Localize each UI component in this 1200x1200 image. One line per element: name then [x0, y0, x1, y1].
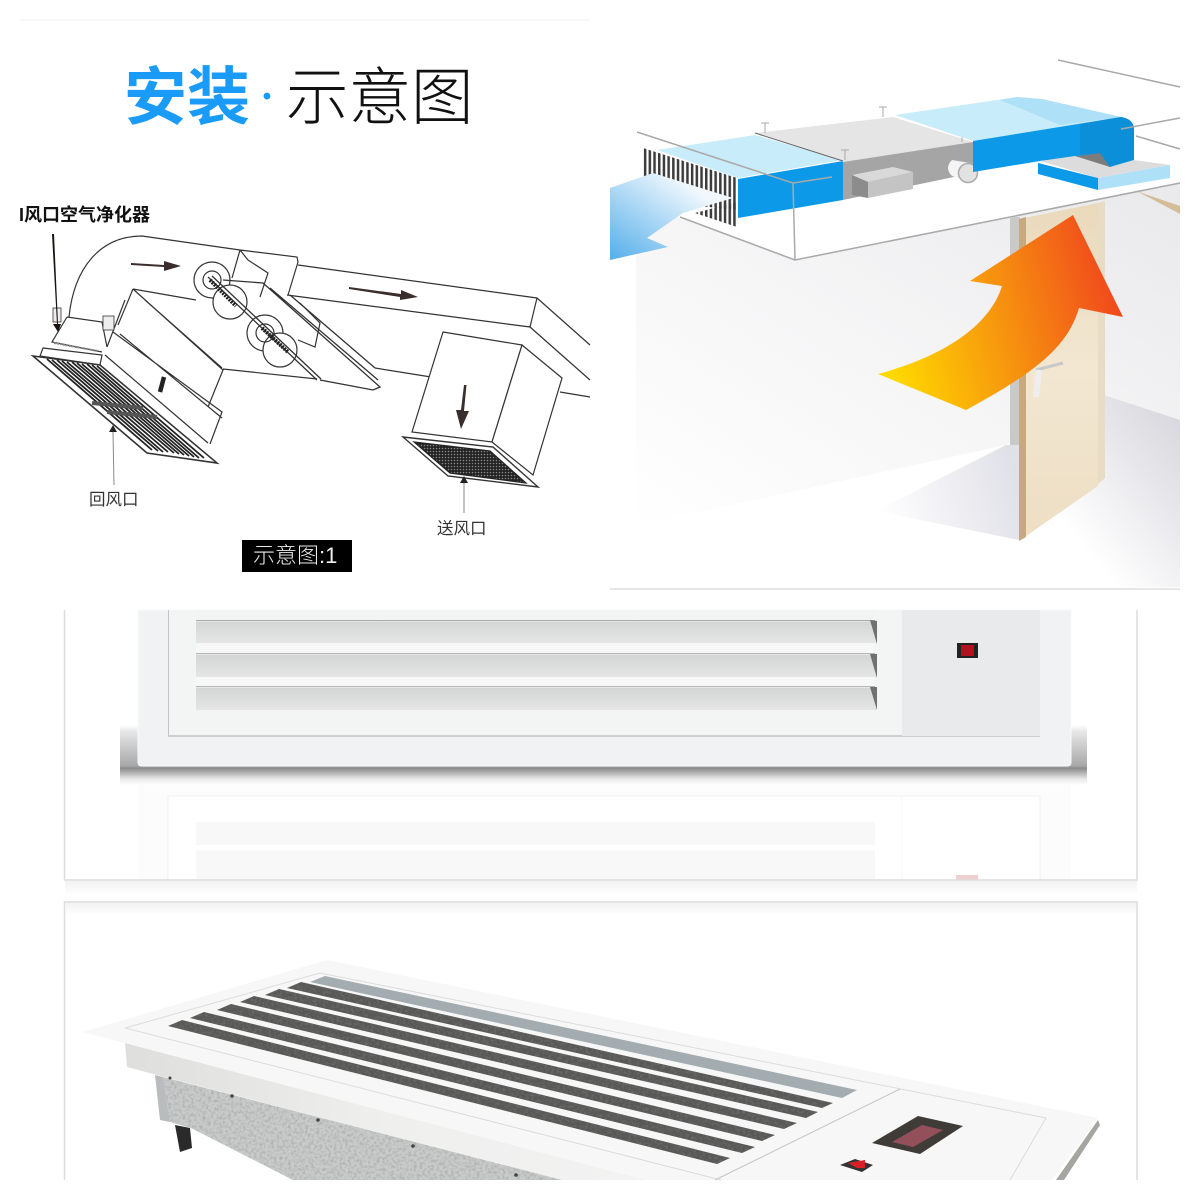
- ceiling lines: [637, 60, 1180, 260]
- return air box: [52, 300, 222, 444]
- supply diffuser: [1038, 156, 1170, 190]
- panel: grille photo: [64, 902, 1137, 1180]
- flow arrows: [131, 261, 469, 429]
- top rule: [20, 19, 590, 21]
- label: supply air: [437, 476, 486, 538]
- label: return air: [89, 425, 138, 509]
- label: return air: 回风口: [89, 491, 138, 509]
- fan unit: [194, 250, 380, 390]
- label: purifier: I风口空气净化器: [19, 204, 150, 225]
- title: •: [263, 83, 271, 110]
- hot air arrow: [878, 215, 1123, 410]
- reflection: [138, 785, 1071, 880]
- unit frame: [138, 610, 1071, 766]
- unit shadow: [120, 725, 1087, 785]
- left duct: [657, 135, 843, 218]
- right underside: [1056, 1120, 1100, 1180]
- panel border: [64, 902, 1137, 1180]
- supply air box: [412, 332, 562, 475]
- wall: [636, 183, 1180, 526]
- badge: 示意图:1: [253, 543, 337, 568]
- duct outline: [69, 236, 590, 407]
- inner top shade: [66, 903, 1136, 915]
- panel: line diagram: [33, 236, 590, 487]
- face plate: [83, 960, 1098, 1180]
- purifier arrow: [52, 234, 61, 332]
- title: 示意图: [286, 63, 474, 133]
- divider: [715, 1089, 900, 1180]
- return air grille: [33, 348, 217, 463]
- slots: [168, 982, 833, 1164]
- cold air arrow: [610, 173, 733, 260]
- panel soft shadow: [65, 881, 1137, 895]
- galvanized body: [155, 1075, 562, 1180]
- floor shadows: [876, 393, 1180, 587]
- door: [1019, 201, 1105, 541]
- inner frame: [125, 973, 1046, 1180]
- panel border: [64, 610, 1137, 880]
- inner panel: [168, 610, 902, 737]
- panel: airflow illustration: [610, 60, 1180, 587]
- bottom rule: [610, 588, 1180, 590]
- vent grille: [643, 148, 737, 227]
- display: [872, 1116, 963, 1154]
- title: 安装: [124, 63, 250, 133]
- beam: [1136, 191, 1180, 214]
- louvers: [196, 610, 877, 710]
- badge: [242, 540, 352, 572]
- label: supply air: 送风口: [437, 519, 486, 538]
- supply air grille: [403, 437, 538, 487]
- panel: front view: [64, 610, 1137, 895]
- door frame: [1010, 217, 1020, 445]
- casing band: [125, 1043, 646, 1180]
- grey fan box: [755, 107, 978, 200]
- title: [124, 63, 474, 133]
- rocker switch: [840, 1159, 873, 1172]
- switch: [957, 643, 978, 658]
- right duct: [895, 97, 1134, 172]
- top slot: [310, 976, 857, 1098]
- control panel: [902, 610, 1040, 736]
